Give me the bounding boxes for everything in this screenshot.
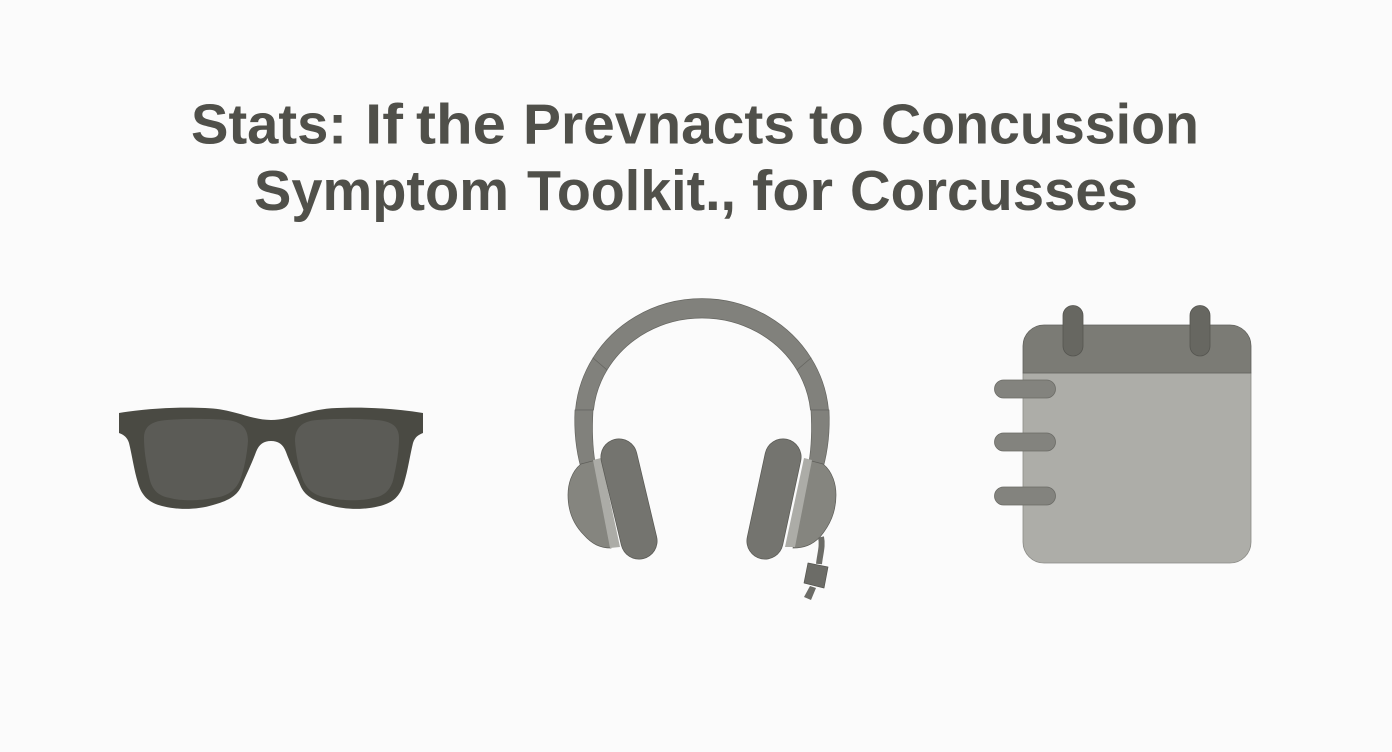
icon: calendar notebook xyxy=(994,306,1251,563)
right binding ring xyxy=(1190,306,1210,356)
headband top xyxy=(593,299,811,370)
left pad xyxy=(619,457,639,541)
icon: headset xyxy=(568,299,836,600)
title: to xyxy=(809,92,864,156)
title: If xyxy=(365,92,404,156)
title: Stats: xyxy=(191,92,347,156)
left binding ring xyxy=(1063,306,1083,356)
title: the xyxy=(416,92,506,156)
title: Toolkit., xyxy=(527,159,736,223)
calendar header xyxy=(1023,325,1251,373)
title: for xyxy=(752,159,833,223)
right arm xyxy=(809,410,829,468)
icon: sunglasses xyxy=(119,408,423,509)
left strip xyxy=(593,458,620,548)
calendar body xyxy=(1023,373,1251,563)
title xyxy=(191,92,1199,223)
title: Symptom xyxy=(254,159,509,223)
microphone cable xyxy=(819,537,822,564)
left arm xyxy=(575,410,595,468)
tab three xyxy=(994,487,1056,505)
right strip xyxy=(785,458,812,547)
title: Corcusses xyxy=(850,159,1138,223)
right lens xyxy=(295,419,399,500)
left lens xyxy=(144,419,248,500)
tab one xyxy=(994,380,1056,398)
tab two xyxy=(994,433,1056,451)
right ear cup xyxy=(793,460,836,548)
title: Concussion xyxy=(881,92,1199,156)
headband left side xyxy=(576,358,607,410)
title: Prevnacts xyxy=(523,92,795,156)
microphone tip xyxy=(804,586,816,600)
right pad xyxy=(765,457,783,541)
microphone block xyxy=(804,563,828,588)
sunglasses frame xyxy=(119,408,423,509)
headband right side xyxy=(797,358,828,410)
left ear cup xyxy=(568,460,611,548)
